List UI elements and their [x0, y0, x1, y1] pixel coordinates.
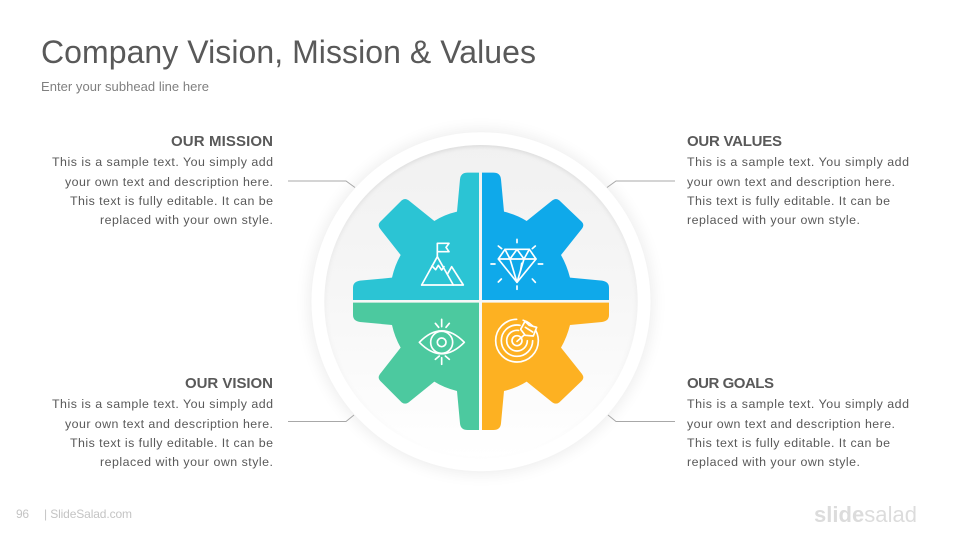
- icon: mountain with flag: [422, 243, 463, 285]
- leader line: vision: [288, 415, 354, 422]
- body: our goals: [687, 397, 909, 469]
- body: our vision: This is a sample text. You simply add: [52, 397, 273, 411]
- body: our mission: your own text and description here.: [65, 175, 273, 189]
- body: our goals: your own text and description here.: [687, 417, 895, 431]
- heading: our values: OUR VALUES: [687, 133, 782, 150]
- body: our vision: your own text and description here.: [65, 417, 273, 431]
- icon: diamond: [491, 239, 543, 289]
- leader line: mission: [288, 181, 355, 188]
- body: our goals: This is a sample text. You simply add: [687, 397, 909, 411]
- body: our mission: [52, 155, 273, 227]
- gear quadrant: goals: [482, 303, 609, 430]
- gear quadrant: vision: [353, 303, 479, 430]
- body: our values: your own text and description here.: [687, 175, 895, 189]
- text block: our mission: [52, 133, 273, 227]
- leader line: values: [607, 181, 675, 188]
- body: our values: [687, 155, 909, 227]
- heading: our mission: OUR MISSION: [171, 133, 273, 150]
- title: Company Vision, Mission & Values: [41, 34, 536, 70]
- logo: slidesalad: slidesalad: [814, 502, 917, 527]
- text block: our values: [687, 133, 909, 227]
- subhead: Enter your subhead line here: [41, 79, 209, 94]
- body: our values: This text is fully editable. It can be: [687, 194, 890, 208]
- body: our values: This is a sample text. You simply add: [687, 155, 909, 169]
- circular gear badge: [310, 131, 652, 473]
- body: our vision: replaced with your own style.: [100, 455, 273, 469]
- body: our mission: replaced with your own style.: [100, 213, 273, 227]
- body: our vision: This text is fully editable. It can be: [70, 436, 273, 450]
- icon: target with arrow: [496, 319, 538, 362]
- body: our vision: [52, 397, 273, 469]
- heading: our vision: OUR VISION: [185, 375, 273, 392]
- footer: site name: | SlideSalad.com: [44, 507, 132, 521]
- body: our goals: replaced with your own style.: [687, 455, 860, 469]
- body: our mission: This text is fully editable. It can be: [70, 194, 273, 208]
- heading: our goals: OUR GOALS: [687, 375, 774, 392]
- body: our goals: This text is fully editable. It can be: [687, 436, 890, 450]
- body: our values: replaced with your own style.: [687, 213, 860, 227]
- text block: our vision: [52, 375, 273, 469]
- gear quadrant: mission: [353, 173, 479, 300]
- body: our mission: This is a sample text. You simply add: [52, 155, 273, 169]
- footer: page number: 96: [16, 507, 29, 521]
- gear quadrant: values: [482, 173, 609, 300]
- leader line: goals: [608, 415, 675, 422]
- icons: [419, 239, 543, 364]
- icon: eye: [419, 319, 464, 364]
- gear: [353, 173, 609, 430]
- text block: our goals: [687, 375, 909, 469]
